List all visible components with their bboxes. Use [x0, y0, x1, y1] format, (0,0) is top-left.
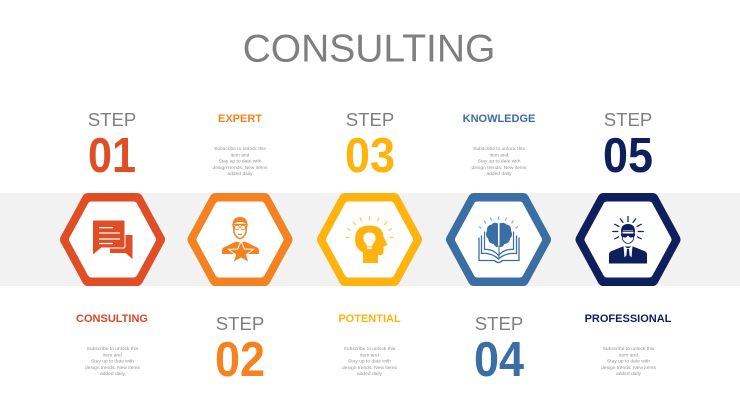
knowledge text block	[463, 113, 535, 177]
step 02 heading	[215, 313, 265, 387]
step 04 heading	[474, 313, 524, 387]
knowledge text block: KNOWLEDGE	[463, 113, 535, 125]
icon: agent with sunglasses	[609, 216, 647, 264]
step 04 heading: STEP	[475, 313, 523, 334]
step 05 heading: 05	[603, 129, 653, 183]
consulting text block: Stay up to date with	[91, 359, 134, 365]
potential text block: design trends. New items	[342, 365, 398, 371]
step 03 heading: 03	[345, 129, 395, 183]
professional text block: design trends. New items	[601, 365, 657, 371]
consulting text block	[76, 313, 148, 377]
icon: head with light bulb	[346, 216, 394, 263]
consulting text block: Subscribe to unlock this	[87, 346, 139, 352]
expert text block: Subscribe to unlock this	[214, 146, 266, 152]
step 01 heading	[88, 109, 136, 183]
professional text block: added daily	[616, 371, 642, 377]
professional text block: item and	[619, 352, 638, 358]
consulting text block: design trends. New items	[85, 365, 141, 371]
step 05 heading	[603, 109, 653, 183]
knowledge text block: design trends. New items	[472, 165, 527, 171]
consulting text block: added daily	[100, 371, 126, 377]
professional text block: PROFESSIONAL	[585, 313, 672, 325]
potential text block: item and	[360, 352, 379, 358]
potential text block: POTENTIAL	[338, 313, 401, 325]
step 05 heading: STEP	[604, 109, 652, 130]
knowledge text block: Stay up to date with	[478, 159, 521, 165]
professional text block	[585, 313, 672, 377]
expert text block: item and	[231, 152, 250, 158]
potential text block: Subscribe to unlock this	[344, 346, 396, 352]
expert text block: added daily	[227, 171, 253, 177]
hexagon 5: professional icon	[582, 199, 674, 280]
step 03 heading: STEP	[346, 109, 394, 130]
consulting text block: item and	[103, 352, 122, 358]
knowledge text block: added daily	[486, 171, 512, 177]
professional text block: Stay up to date with	[607, 359, 650, 365]
potential text block	[338, 313, 401, 377]
potential text block: added daily	[357, 371, 383, 377]
icon: expert with star	[222, 217, 259, 262]
step 03 heading	[345, 109, 395, 183]
step 02 heading: 02	[215, 333, 265, 387]
step 01 heading: STEP	[88, 109, 136, 130]
expert text block	[213, 113, 268, 177]
hexagon 4: knowledge icon	[452, 199, 545, 280]
step 04 heading: 04	[474, 333, 524, 387]
step 01 heading: 01	[88, 129, 136, 183]
expert text block: Stay up to date with	[219, 159, 262, 165]
consulting text block: CONSULTING	[76, 313, 148, 325]
knowledge text block: item and	[490, 152, 509, 158]
title: CONSULTING	[243, 28, 495, 70]
step 02 heading: STEP	[216, 313, 264, 334]
knowledge text block: Subscribe to unlock this	[473, 146, 525, 152]
hexagon 2: expert icon	[194, 199, 286, 280]
potential text block: Stay up to date with	[348, 359, 391, 365]
hexagon 1: consulting chat icon	[66, 199, 159, 280]
hexagon 3: potential icon	[323, 199, 416, 280]
expert text block: EXPERT	[218, 113, 262, 125]
icon: brain over open book	[479, 216, 519, 262]
professional text block: Subscribe to unlock this	[603, 346, 655, 352]
icon: chat bubbles	[92, 220, 132, 259]
expert text block: design trends. New items	[213, 165, 268, 171]
